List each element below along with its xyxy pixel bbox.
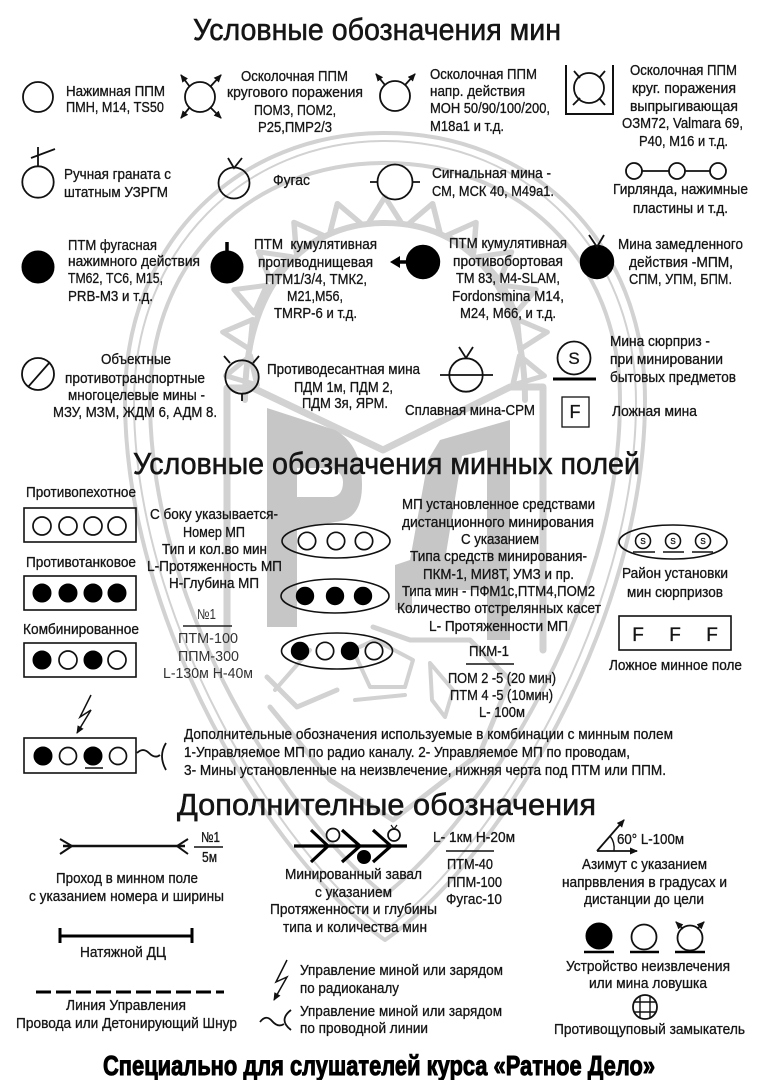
text: garland — [613, 182, 748, 217]
text: hand grenade: Ручная граната с — [64, 167, 171, 183]
text: AT shaped charge belly mine: противоднищевая — [258, 255, 373, 271]
text: anti-handling devices: Устройство неизвлечения — [566, 959, 730, 975]
text: anti-landing mine — [267, 362, 420, 412]
icon: azimuth — [597, 820, 637, 851]
text: remote notation example — [448, 644, 556, 721]
text: AT side mine: ПТМ кумулятивная — [449, 236, 567, 252]
icon: directional fragmentation mine — [376, 74, 415, 111]
watermark: shield emblem — [125, 133, 645, 940]
text: control line: Провода или Детонирующий Шнур — [16, 1016, 237, 1032]
text: AT side mine: ТМ 83, М4-SLAM, — [456, 271, 560, 287]
text: azimuth caption — [562, 857, 727, 908]
text: surprise mine: Мина сюрприз - — [610, 334, 710, 350]
text: wire control: по проводной линии — [300, 1021, 428, 1037]
text: remote mining: Типа мин - ПФМ1с,ПТМ4,ПОМ2 — [402, 584, 595, 600]
label: combined: Комбинированное — [23, 622, 139, 638]
text: side notes: С боку указывается- — [150, 507, 278, 523]
text: abatis notation — [433, 830, 515, 908]
surprise mines area: S — [640, 537, 646, 546]
text: passage caption — [29, 871, 224, 905]
text: additional notes: Дополнительные обозначения используемые в комбинации с минным полем — [184, 727, 673, 743]
text: side notes: Н-Глубина МП — [169, 576, 259, 592]
text: remote mining: Количество отстрелянных касет — [397, 601, 601, 617]
icon: bounding mine — [566, 65, 613, 114]
text: tripwire: Натяжной ДЦ — [80, 945, 166, 961]
text: remote mining: ПКМ-1, МИ8Т, УМЗ и пр. — [423, 567, 574, 583]
text: AT shaped charge belly mine — [254, 237, 377, 322]
text: abatis notation: ПТМ-40 — [447, 857, 493, 873]
text: side notes: L-Протяженность МП — [147, 559, 282, 575]
text: circular fragmentation mine: Осколочная ППМ — [241, 69, 348, 85]
text: delayed action mine: СПМ, УПМ, БПМ. — [629, 272, 732, 288]
text: directional fragmentation mine: напр. действия — [430, 84, 525, 100]
text: signal mine: СМ, МСК 40, М49а1. — [432, 184, 554, 200]
panel: minefields — [23, 485, 742, 779]
icon: surprise mine — [553, 342, 596, 379]
text: anti-landing mine: ПДМ 1м, ПДМ 2, — [294, 380, 393, 396]
surprise mines area — [619, 525, 727, 559]
text: azimuth value: 60° L-100м — [617, 832, 684, 848]
text: pressure AP mine: ПМН, М14, TS50 — [66, 100, 164, 116]
false minefield: F — [632, 625, 644, 646]
text: remote notation example: ПОМ 2 -5 (20 мин) — [448, 671, 556, 687]
text: signal mine: Сигнальная мина - — [432, 166, 551, 182]
text: anti-probe switch: Противощуповый замыкатель — [554, 1022, 745, 1038]
text: control line — [16, 998, 237, 1032]
text: circular fragmentation mine: Р25,ПМР2/3 — [258, 120, 332, 136]
icon: garland — [626, 163, 726, 179]
text: AT side mine: противобортовая — [453, 254, 563, 270]
text: example minefield notation — [163, 607, 253, 682]
text: bounding mine: круг. поражения — [632, 81, 736, 97]
text: AT side mine: Fordonsmina M14, — [452, 289, 564, 305]
text: object mine — [53, 352, 217, 421]
text: directional fragmentation mine: МОН 50/90/100/200, — [430, 101, 550, 117]
text: passage number and width: №1 — [201, 830, 220, 846]
heading: additional symbols: Дополнителные обозначения — [177, 787, 596, 822]
false minefield: F — [669, 625, 681, 646]
text: remote notation example: L- 100м — [479, 705, 525, 721]
text: AT blast mine: ПТМ фугасная — [68, 238, 157, 254]
minefield box: antitank — [24, 576, 136, 610]
text: abatis notation: L- 1км Н-20м — [433, 830, 515, 846]
icon: circular fragmentation mine — [181, 75, 221, 118]
text: pressure AP mine: Нажимная ППМ — [66, 84, 165, 100]
text: anti-landing mine: Противодесантная мина — [267, 362, 420, 378]
text: hand grenade: штатным УЗРГМ — [64, 185, 168, 201]
icon: signal mine — [370, 164, 420, 200]
heading: minefield symbols: Условные обозначения минных полей — [133, 446, 640, 481]
text: remote mining: дистанционного минирования — [402, 515, 594, 531]
icon: delayed action mine — [580, 235, 614, 279]
text: AT shaped charge belly mine: М21,М56, — [287, 289, 343, 305]
panel: mine symbols — [22, 63, 748, 427]
false minefield: F — [706, 625, 718, 646]
text: remote mining: С указанием — [461, 532, 539, 548]
text: remote notation example: ПТМ 4 -5 (10мин) — [450, 688, 553, 704]
text: signal mine — [432, 166, 554, 200]
icon: tripwire — [60, 928, 193, 943]
text: wire control — [300, 1004, 502, 1037]
icon: minefield passage — [60, 839, 188, 854]
text: circular fragmentation mine — [227, 69, 363, 136]
text: mined abatis: с указанием — [315, 885, 392, 901]
icon: wire control — [137, 743, 166, 770]
text: anti-handling devices — [566, 959, 730, 992]
text: control line: Линия Управления — [66, 998, 186, 1014]
text: AT shaped charge belly mine: ПТМ1/3/4, ТМК2, — [265, 272, 367, 288]
text: AT side mine — [449, 236, 567, 322]
minefield box: combined — [24, 643, 136, 677]
text: surprise mines area: Район установки — [622, 566, 728, 582]
text: directional fragmentation mine: М18а1 и т.д. — [430, 119, 504, 135]
text: radio control: по радиоканалу — [300, 981, 400, 997]
text: radio control — [300, 963, 503, 997]
text: additional notes: 1-Управляемое МП по радио каналу. 2- Управляемое МП по проводам, — [184, 745, 630, 761]
text: object mine: МЗУ, МЗМ, ЖДМ 6, АДМ 8. — [53, 405, 217, 421]
text: object mine: многоцелевые мины - — [68, 388, 205, 404]
icon: AT side mine — [390, 245, 440, 279]
text: example minefield notation: ПТМ-100 — [178, 631, 238, 647]
text: remote mining: МП установленное средствами — [402, 497, 595, 513]
text: passage caption: Проход в минном поле — [56, 871, 198, 887]
minefield box: antipersonnel — [24, 508, 136, 542]
text: AT blast mine: ТМ62, ТС6, М15, — [68, 271, 163, 287]
text: additional notes — [184, 727, 673, 779]
text: delayed action mine — [618, 237, 743, 288]
text: bounding mine: ОЗМ72, Valmara 69, — [622, 116, 743, 132]
text: remote mining: L- Протяженности МП — [429, 619, 568, 635]
text: delayed action mine: действия -МПМ, — [629, 255, 733, 271]
icon: control line — [36, 990, 224, 994]
text: garland: пластины и т.д. — [633, 201, 728, 217]
text: additional notes: 3- Мины установленные на неизвлечение, нижняя черта под ПТМ или ППМ. — [184, 763, 666, 779]
false minefield — [619, 616, 731, 650]
text: example minefield notation: №1 — [197, 607, 216, 623]
icon: anti-handling devices — [584, 922, 705, 952]
text: radio control: Управление миной или зарядом — [300, 963, 503, 979]
text: passage number and width: 5м — [202, 850, 217, 866]
text: mined abatis — [270, 867, 437, 936]
text: remote mining: Типа средств минирования- — [410, 549, 587, 565]
icon: mined abatis — [294, 825, 407, 864]
icon: object mine — [22, 358, 54, 390]
icon: surprise mine: S — [568, 349, 580, 368]
text: azimuth caption: напрввления в градусах и — [562, 875, 727, 891]
text: bounding mine: Р40, М16 и т.д. — [639, 134, 728, 150]
text: surprise mine: бытовых предметов — [610, 370, 736, 386]
icon: floating mine — [440, 347, 493, 392]
icon: anti-probe switch — [633, 995, 657, 1019]
text: passage number and width — [194, 830, 223, 866]
text: fougasse: Фугас — [273, 173, 310, 189]
text: mined abatis: Протяженности и глубины — [270, 902, 437, 918]
icon: hand grenade — [22, 147, 55, 198]
icon: anti-landing mine — [224, 356, 259, 401]
text: AT shaped charge belly mine: ПТМ кумулятивная — [254, 237, 377, 253]
text: circular fragmentation mine: ПОМЗ, ПОМ2, — [254, 103, 336, 119]
icon: pressure AP mine — [23, 82, 53, 112]
text: false minefield: Ложное минное поле — [609, 658, 742, 674]
text: mined abatis: Минированный завал — [285, 867, 422, 883]
text: azimuth caption: дистанции до цели — [584, 892, 704, 908]
text: AT blast mine: PRB-М3 и т.д. — [68, 289, 153, 305]
panel: additional symbols — [16, 820, 745, 1038]
text: directional fragmentation mine — [430, 67, 550, 135]
minefield box: controlled — [24, 738, 136, 773]
text: side notes: Номер МП — [183, 525, 245, 541]
text: example minefield notation: L-130м Н-40м — [163, 666, 253, 682]
text: surprise mines area: мин сюрпризов — [627, 585, 723, 601]
text: bounding mine: Осколочная ППМ — [630, 63, 737, 79]
text: floating mine: Сплавная мина-СРМ — [405, 403, 535, 419]
text: surprise mine — [610, 334, 736, 386]
text: passage caption: с указанием номера и ширины — [29, 889, 224, 905]
icon: false mine: F — [570, 402, 580, 422]
text: AT shaped charge belly mine: TMRP-6 и т.д. — [274, 306, 357, 322]
surprise mines area: S — [700, 537, 706, 546]
text: azimuth caption: Азимут с указанием — [582, 857, 707, 873]
text: AT blast mine — [68, 238, 200, 305]
text: pressure AP mine — [66, 84, 165, 116]
text: AT blast mine: нажимного действия — [68, 254, 200, 270]
text: wire control: Управление миной или зарядом — [300, 1004, 502, 1020]
surprise mines area: S — [670, 537, 676, 546]
icon: AT blast mine — [22, 251, 54, 283]
remote minefield: antitank — [281, 579, 389, 613]
icon: wire control — [260, 1010, 291, 1030]
text: remote mining — [397, 497, 601, 635]
icon: fougasse — [218, 158, 250, 198]
text: abatis notation: ППМ-100 — [447, 875, 502, 891]
text: anti-landing mine: ПДМ 3я, ЯРМ. — [302, 396, 388, 412]
text: object mine: противотранспортные — [65, 371, 205, 387]
icon: radio lightning — [274, 960, 287, 1000]
text: surprise mine: при минировании — [610, 352, 723, 368]
title: Условные обозначения мин — [193, 12, 561, 47]
text: surprise mines area — [622, 566, 728, 601]
text: object mine: Объектные — [101, 352, 171, 368]
remote minefield: combined — [282, 633, 392, 669]
text: side notes — [147, 507, 282, 592]
text: hand grenade — [64, 167, 171, 201]
remote minefield: antipersonnel — [282, 524, 390, 558]
text: directional fragmentation mine: Осколочная ППМ — [430, 67, 537, 83]
text: circular fragmentation mine: кругового поражения — [227, 85, 363, 101]
text: remote notation example: ПКМ-1 — [469, 644, 509, 660]
text: anti-handling devices: или мина ловушка — [589, 976, 707, 992]
label: antipersonnel: Противопехотное — [26, 485, 136, 501]
text: AT side mine: М24, М66, и т.д. — [460, 306, 556, 322]
text: mined abatis: типа и количества мин — [283, 920, 427, 936]
text: garland: Гирлянда, нажимные — [613, 182, 748, 198]
text: delayed action mine: Мина замедленного — [618, 237, 743, 253]
icon: radio control lightning — [77, 695, 91, 733]
text: example minefield notation: ППМ-300 — [178, 649, 239, 665]
text: bounding mine: выпрыгивающая — [630, 99, 738, 115]
text: side notes: Тип и кол.во мин — [162, 542, 267, 558]
text: bounding mine — [622, 63, 743, 150]
icon: AT shaped charge belly mine — [211, 242, 243, 283]
text: false mine: Ложная мина — [612, 404, 697, 420]
icon: false mine — [562, 397, 589, 427]
label: antitank: Противотанковое — [26, 555, 136, 571]
text: abatis notation: Фугас-10 — [446, 892, 502, 908]
